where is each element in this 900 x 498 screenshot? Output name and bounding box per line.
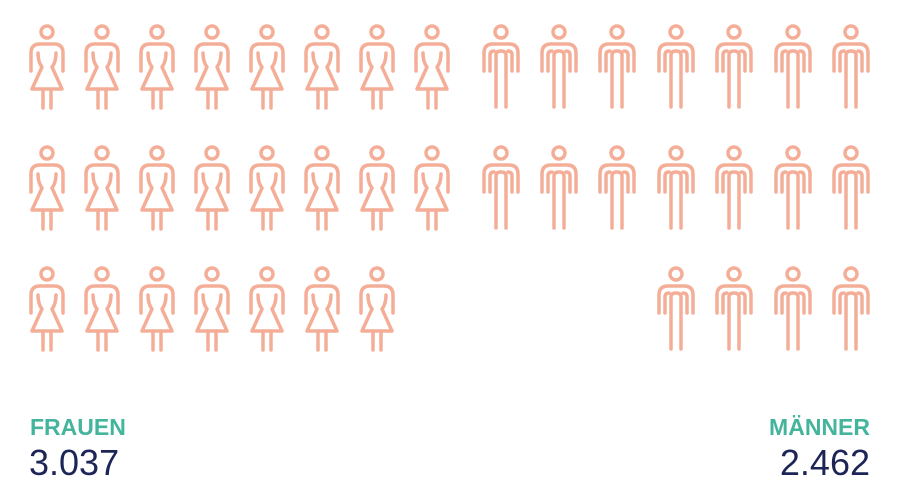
number: Männer: 2.462 — [780, 442, 870, 483]
women icons — [31, 26, 448, 350]
number: Frauen: 3.037 — [29, 442, 119, 483]
label: Männer: MÄNNER — [769, 414, 870, 440]
men icons — [484, 26, 868, 349]
label: Frauen: FRAUEN — [30, 414, 126, 440]
